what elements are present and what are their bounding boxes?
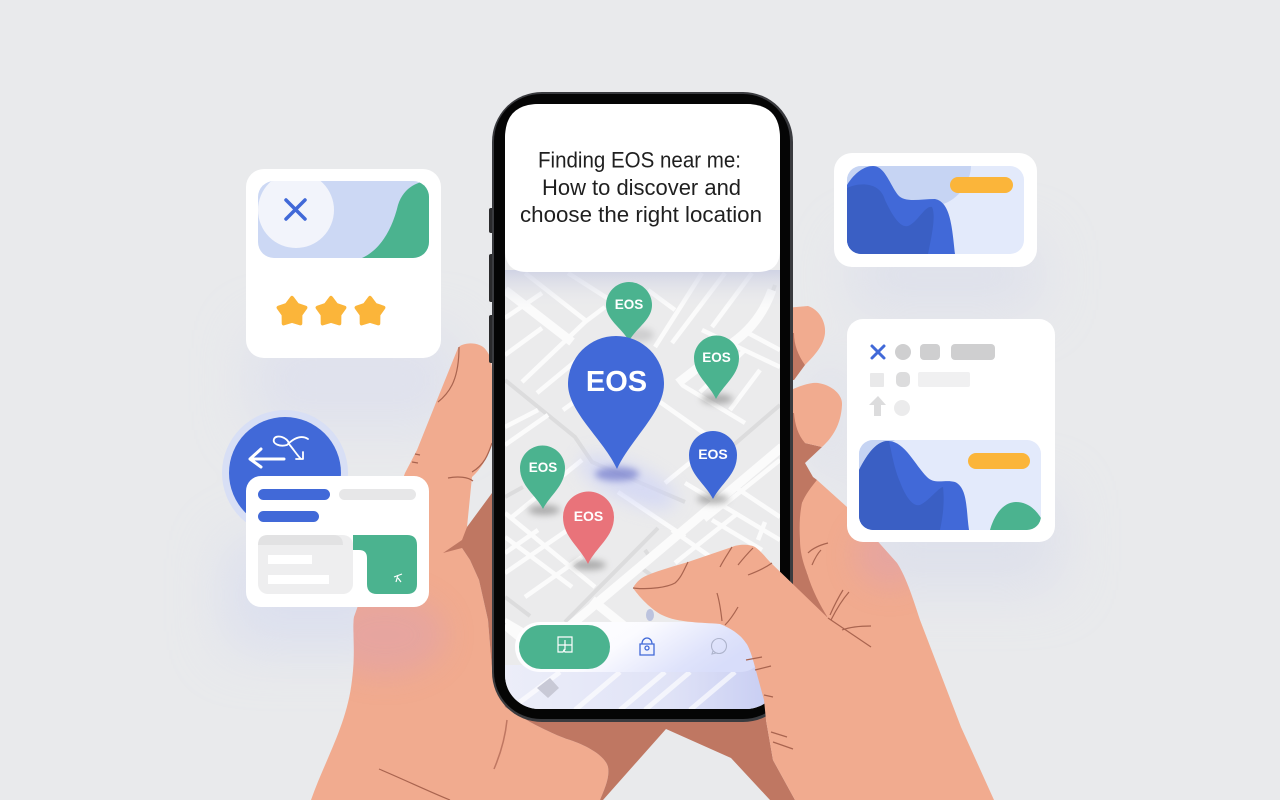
- phone: [489, 92, 793, 722]
- nav active pill: [519, 625, 610, 669]
- icon: chat: [712, 638, 726, 654]
- green tile: [353, 535, 417, 594]
- badge: route circle: [222, 410, 348, 536]
- pin: green top: EOS: [615, 297, 643, 312]
- bottom tint: [505, 665, 764, 709]
- blue glow: [578, 453, 675, 514]
- pin: red: EOS: [574, 508, 603, 524]
- title: choose the right location: [520, 202, 762, 227]
- card: rating: [246, 169, 441, 358]
- pin: green right: [694, 336, 739, 404]
- icon: up arrow: [869, 396, 886, 416]
- map roads gray: [505, 285, 780, 622]
- card: list: [246, 476, 429, 607]
- title: [520, 148, 762, 227]
- pin: large blue: EOS: [586, 366, 647, 398]
- card: image top right: [834, 153, 1037, 267]
- pink tint on palm: [354, 606, 440, 674]
- label pill: [968, 453, 1030, 469]
- icon: bag: [640, 638, 654, 655]
- pin: red: [563, 492, 614, 570]
- left hand: [311, 343, 608, 800]
- stars: [279, 298, 383, 323]
- pink tint on palm: [859, 542, 906, 584]
- pin: green top: [606, 282, 654, 342]
- small marker: [646, 609, 654, 621]
- pin: blue right: [689, 431, 737, 504]
- thumb crease lines: [379, 347, 507, 800]
- pin: green left: [520, 446, 565, 515]
- hand shadow under phone: [443, 493, 795, 800]
- right hand fingers behind phone: [785, 306, 842, 618]
- label pill: [950, 177, 1013, 193]
- pin: blue right: EOS: [698, 446, 728, 462]
- pin: large blue: [568, 336, 664, 481]
- icon: route arrow: [250, 437, 308, 467]
- pin: green right: EOS: [702, 350, 731, 365]
- title: How to discover and: [542, 175, 741, 200]
- screen: [505, 104, 782, 715]
- icon: close: [286, 200, 305, 219]
- icon: map: [558, 637, 572, 652]
- card: list with image: [847, 319, 1055, 542]
- bottom nav bar: [515, 622, 765, 672]
- image tile: [859, 440, 1041, 530]
- map roads white: [505, 273, 782, 660]
- pin: green left: EOS: [529, 460, 557, 475]
- icon: close: [872, 346, 884, 358]
- soft card shadows: [225, 240, 1060, 650]
- right hand with thumb over phone: [633, 480, 994, 800]
- title panel: [505, 104, 780, 272]
- top shade: [505, 270, 780, 294]
- title: Finding EOS near me:: [538, 148, 741, 172]
